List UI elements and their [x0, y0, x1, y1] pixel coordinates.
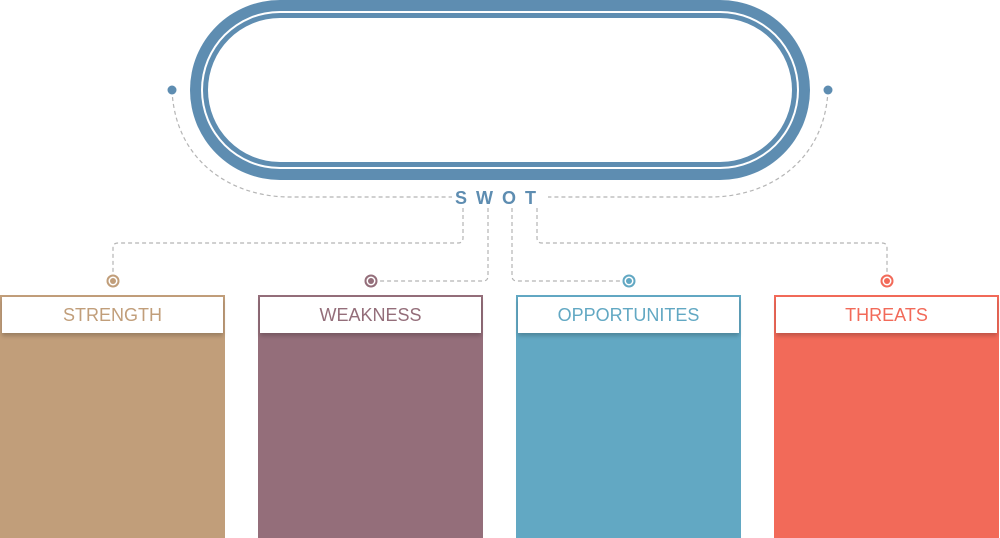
- card: strength: STRENGTH: [63, 304, 162, 324]
- connectors: [113, 90, 887, 281]
- pill frame: [190, 0, 810, 180]
- card: weakness: [258, 295, 483, 538]
- card: strength: [0, 295, 225, 538]
- end dots: [168, 86, 832, 94]
- card: threats: [774, 295, 999, 538]
- card: opportunities: OPPORTUNITES: [558, 304, 699, 324]
- card: opportunities: [516, 295, 741, 538]
- card: weakness: WEAKNESS: [319, 304, 422, 324]
- card markers: [108, 276, 892, 286]
- card: threats: THREATS: [845, 304, 928, 324]
- SWOT label: SWOT: [455, 188, 545, 208]
